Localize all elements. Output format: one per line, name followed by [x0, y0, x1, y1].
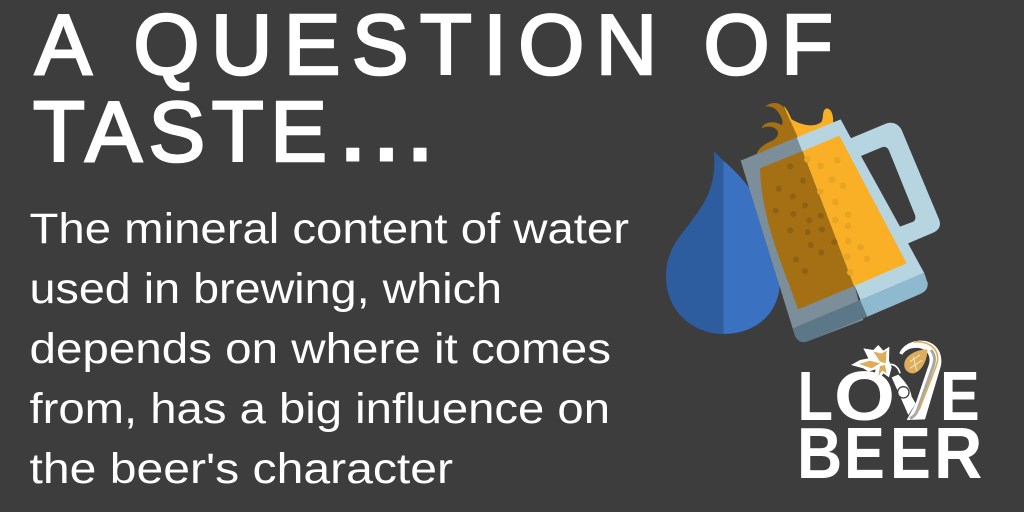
title	[33, 0, 833, 180]
icon: beer	[760, 136, 907, 309]
logo word LOVE: O	[834, 357, 895, 435]
logo word BEER	[797, 413, 982, 494]
body text: from, has a big influence on	[30, 385, 610, 433]
title: ...	[341, 85, 442, 180]
icon: water drop and beer mug	[666, 103, 940, 342]
logo word LOVE: E	[940, 356, 980, 435]
body text: the beer's character	[30, 445, 453, 493]
body text: used in brewing, which	[30, 265, 502, 313]
logo: hop V and leaf	[851, 341, 941, 420]
logo word BEER: B	[797, 414, 842, 494]
logo word LOVE: L	[798, 357, 833, 435]
icon: water drop	[666, 151, 780, 334]
icon: mug handle	[847, 123, 940, 244]
logo: Love Beer	[797, 341, 982, 494]
body text: depends on where it comes	[30, 325, 611, 373]
logo word LOVE	[798, 356, 980, 435]
body text	[30, 205, 629, 493]
title: TASTE	[33, 85, 327, 180]
logo word BEER: E	[844, 414, 885, 494]
title: A QUESTION OF	[35, 0, 833, 93]
icon: mug glass	[741, 119, 928, 342]
icon: beer foam	[757, 103, 833, 154]
body text: The mineral content of water	[30, 205, 629, 253]
logo word BEER: R	[934, 413, 982, 494]
logo word BEER: E	[890, 414, 931, 494]
